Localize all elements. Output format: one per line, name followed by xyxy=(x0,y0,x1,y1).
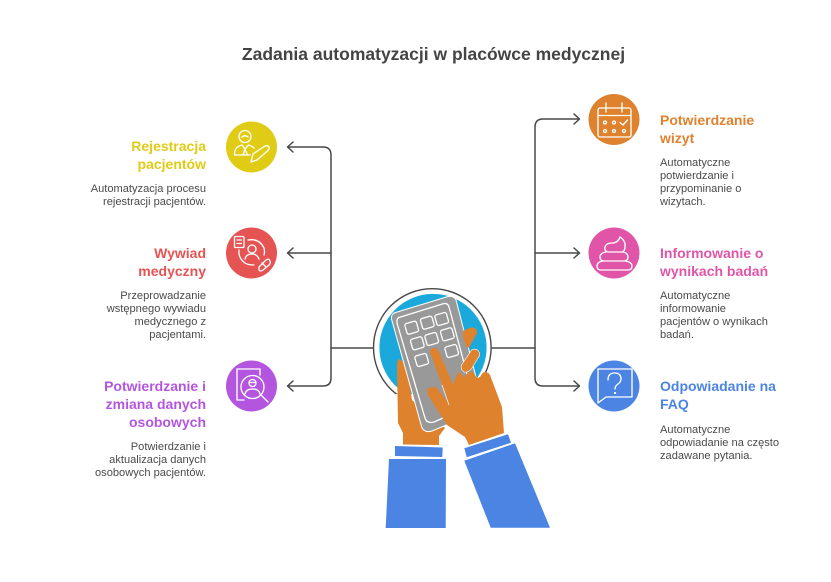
description: przypominanie o xyxy=(660,183,741,195)
right hand crease xyxy=(442,385,449,405)
keypad inner outline xyxy=(397,303,475,422)
description: odpowiadanie na często xyxy=(660,437,779,449)
keypad body xyxy=(391,296,483,432)
heading: medyczny xyxy=(138,263,206,279)
icon: person with pencil xyxy=(226,122,277,172)
description: wstępnego wywiadu xyxy=(106,303,206,315)
description: badań. xyxy=(660,329,694,341)
heading: Rejestracja xyxy=(131,138,206,154)
heading: Potwierdzanie xyxy=(660,112,754,128)
icon: document and magnifier xyxy=(226,360,277,412)
icon: calendar xyxy=(588,94,640,145)
description: rejestracji pacjentów. xyxy=(103,196,206,208)
heading: osobowych xyxy=(129,414,206,430)
right sleeve xyxy=(464,443,550,528)
description: osobowych pacjentów. xyxy=(95,467,206,479)
blue disc xyxy=(379,294,487,401)
heading: Informowanie o xyxy=(660,245,763,261)
icon: layered mound xyxy=(588,228,640,278)
icon: question bubble xyxy=(588,360,640,412)
description: wizytach. xyxy=(659,196,706,208)
white mask below ring xyxy=(396,394,470,440)
heading: Odpowiadanie na xyxy=(660,378,776,394)
description: zadawane pytania. xyxy=(660,450,753,462)
central illustration: hands on keypad xyxy=(374,289,550,528)
back finger upper xyxy=(463,327,477,348)
right cuff xyxy=(464,434,511,457)
heading: Potwierdzanie i xyxy=(104,378,206,394)
left hand xyxy=(397,359,445,445)
description: Automatyczne xyxy=(660,424,730,436)
item: Potwierdzanie i zmiana danych osobowych xyxy=(95,360,277,479)
description: Automatyczne xyxy=(660,290,730,302)
heading: FAQ xyxy=(660,396,689,412)
back finger lower xyxy=(461,349,480,372)
ring xyxy=(374,289,491,406)
item: Rejestracja pacjentów xyxy=(91,122,277,208)
right hand xyxy=(427,348,504,445)
connector lines left xyxy=(288,142,374,391)
description: medycznego z xyxy=(134,316,206,328)
description: pacjentów o wynikach xyxy=(660,316,768,328)
item: Informowanie o wynikach badań xyxy=(588,228,768,341)
heading: wynikach badań xyxy=(659,263,768,279)
item: Potwierdzanie wizyt xyxy=(588,94,754,208)
description: informowanie xyxy=(660,303,726,315)
description: Potwierdzanie i xyxy=(131,441,206,453)
icon: medical interview xyxy=(226,228,277,278)
item: Wywiad medyczny xyxy=(106,228,277,341)
description: potwierdzanie i xyxy=(660,170,734,182)
heading: wizyt xyxy=(659,130,695,146)
heading: zmiana danych xyxy=(106,396,206,412)
title: Zadania automatyzacji w placówce medycznej xyxy=(242,44,625,64)
heading: pacjentów xyxy=(138,156,206,172)
heading: Wywiad xyxy=(154,245,206,261)
description: aktualizacja danych xyxy=(109,454,206,466)
left sleeve xyxy=(386,459,446,528)
description: Automatyzacja procesu xyxy=(91,183,206,195)
description: pacjentami. xyxy=(149,329,206,341)
keypad keys xyxy=(404,312,459,367)
connector lines right xyxy=(492,114,580,391)
description: Przeprowadzanie xyxy=(120,290,206,302)
left cuff xyxy=(395,446,443,457)
description: Automatyczne xyxy=(660,157,730,169)
item: Odpowiadanie na FAQ xyxy=(588,360,779,462)
